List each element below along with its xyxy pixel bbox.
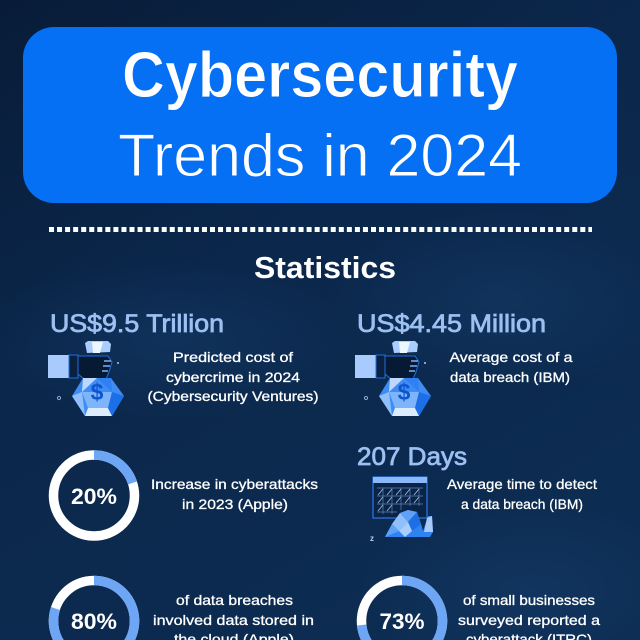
- icon: hand holding money bag: [355, 341, 431, 416]
- stat description: Predicted cost of: [173, 349, 293, 365]
- stat description: data breach (IBM): [450, 369, 570, 385]
- stat description: [148, 349, 318, 404]
- title line 1: Cybersecurity: [122, 38, 518, 111]
- donut chart: 80%: [54, 580, 135, 640]
- stat description: of data breaches: [176, 592, 293, 608]
- icon: hand holding money bag: [48, 341, 124, 416]
- stat description: involved data stored in: [153, 612, 314, 628]
- stat description: Average time to detect: [447, 476, 597, 492]
- stat description: [151, 476, 318, 512]
- stat description: [447, 476, 597, 512]
- icon: calendar with snail: z: [370, 534, 374, 543]
- icon: hand holding money bag: $: [398, 379, 411, 405]
- heading: statistics: Statistics: [254, 250, 396, 285]
- donut chart: 20%: 20%: [71, 484, 117, 509]
- donut chart: 80%: 80%: [71, 609, 117, 634]
- stat description: Increase in cyberattacks: [151, 476, 318, 492]
- stat value: US$9.5 Trillion: [50, 310, 224, 338]
- stat: 207 Days: [357, 443, 597, 543]
- stat: 80%: [54, 580, 314, 640]
- stat: 20%: [54, 455, 318, 536]
- stat description: in 2023 (Apple): [182, 496, 288, 512]
- donut chart: 20%: [54, 455, 134, 536]
- stat value: US$4.45 Million: [357, 310, 546, 338]
- stat description: of small businesses: [463, 592, 595, 608]
- title banner: [23, 27, 617, 203]
- stat description: [450, 349, 573, 385]
- stat: US$9.5 Trillion: [48, 310, 318, 416]
- stat: 73%: [362, 580, 600, 640]
- stat description: (Cybersecurity Ventures): [148, 388, 318, 404]
- donut chart: 73%: [362, 580, 443, 640]
- donut chart: 73%: 73%: [380, 609, 424, 634]
- stat description: cybercrime in 2024: [166, 369, 300, 385]
- stat value: 207 Days: [357, 443, 467, 471]
- stat description: [153, 592, 314, 640]
- icon: calendar with snail: [370, 477, 433, 543]
- stat description: a data breach (IBM): [461, 496, 583, 512]
- icon: hand holding money bag: $: [91, 379, 104, 405]
- title line 2: Trends in 2024: [118, 122, 522, 189]
- stat: US$4.45 Million: [355, 310, 573, 416]
- stat description: Average cost of a: [450, 349, 573, 365]
- stat description: [458, 592, 600, 640]
- stat description: surveyed reported a: [458, 612, 600, 628]
